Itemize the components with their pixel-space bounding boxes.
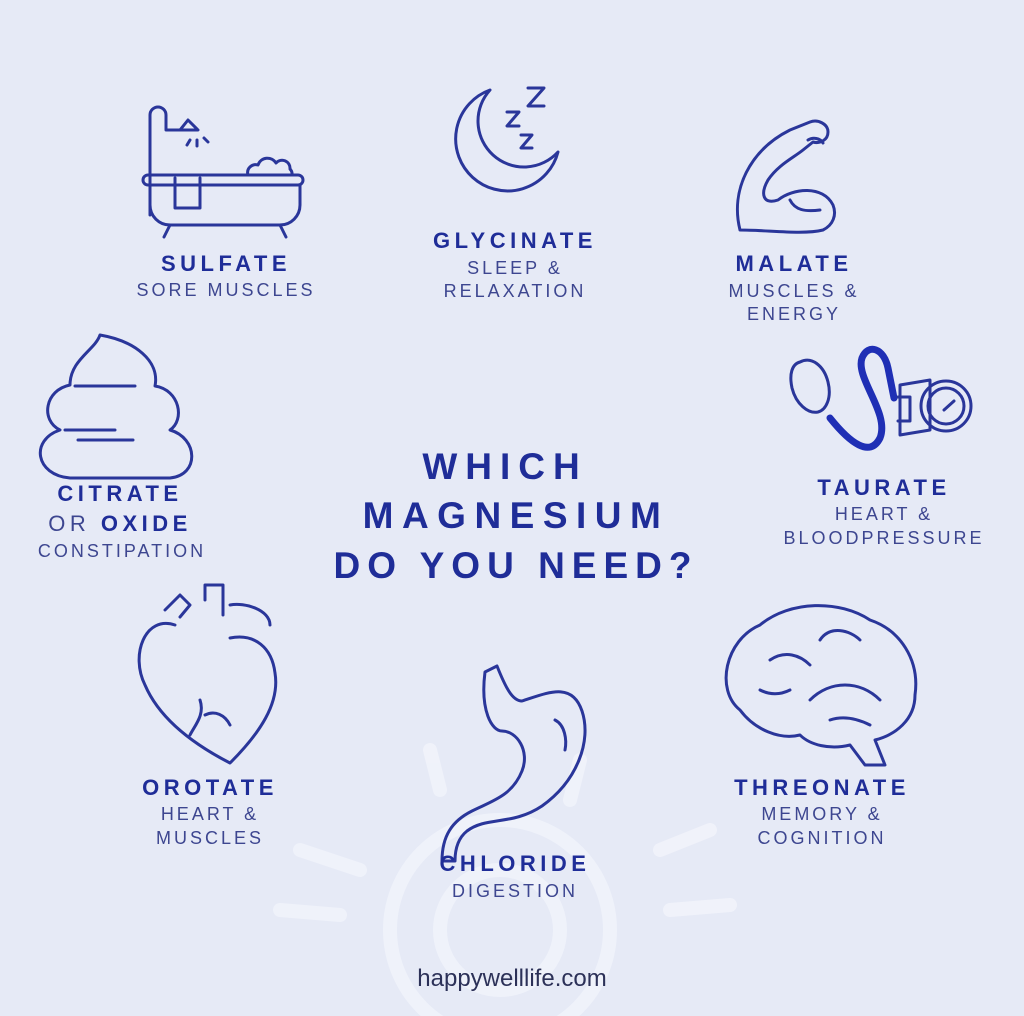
label: orotate bbox=[142, 775, 278, 848]
title: DO YOU NEED? bbox=[334, 545, 698, 586]
label: threonate: THREONATE bbox=[734, 775, 910, 800]
label: glycinate: SLEEP & bbox=[467, 258, 563, 278]
icon: muscle arm bbox=[737, 121, 835, 232]
label: chloride: CHLORIDE bbox=[440, 851, 590, 876]
label: chloride bbox=[440, 851, 590, 901]
icon: poop bbox=[40, 335, 192, 478]
decorative sun watermark bbox=[280, 750, 730, 1016]
icon: blood pressure bbox=[791, 349, 971, 447]
label: threonate: COGNITION bbox=[758, 828, 886, 848]
icon: stomach bbox=[442, 666, 585, 861]
label: sulfate: SORE MUSCLES bbox=[136, 280, 316, 300]
icon: moon zzz bbox=[456, 88, 558, 191]
label: sulfate: SULFATE bbox=[161, 251, 291, 276]
title: MAGNESIUM bbox=[363, 495, 669, 536]
label: threonate bbox=[734, 775, 910, 848]
title: WHICH bbox=[422, 446, 588, 487]
title bbox=[334, 446, 698, 586]
label: taurate: BLOODPRESSURE bbox=[783, 528, 985, 548]
label: citrate: OR OXIDE bbox=[48, 511, 192, 536]
label: taurate: TAURATE bbox=[817, 475, 951, 500]
label: malate: ENERGY bbox=[747, 304, 841, 324]
label: citrate: CONSTIPATION bbox=[38, 541, 206, 561]
label: glycinate: GLYCINATE bbox=[433, 228, 597, 253]
label: malate: MUSCLES & bbox=[728, 281, 860, 301]
label: sulfate bbox=[136, 251, 316, 300]
label: malate: MALATE bbox=[735, 251, 853, 276]
label: orotate: OROTATE bbox=[142, 775, 278, 800]
label: orotate: MUSCLES bbox=[156, 828, 264, 848]
label: malate bbox=[728, 251, 860, 324]
label: taurate bbox=[783, 475, 985, 548]
icon: bathtub bbox=[143, 107, 303, 237]
label: orotate: HEART & bbox=[161, 804, 259, 824]
icon: heart bbox=[139, 585, 276, 763]
label: taurate: HEART & bbox=[835, 504, 933, 524]
footer url: happywelllife.com bbox=[417, 965, 607, 992]
icon: brain bbox=[726, 606, 916, 765]
label: glycinate: RELAXATION bbox=[444, 281, 586, 301]
label: citrate: CITRATE bbox=[57, 481, 183, 506]
label: threonate: MEMORY & bbox=[761, 804, 883, 824]
label: chloride: DIGESTION bbox=[452, 881, 578, 901]
label: citrate bbox=[38, 481, 206, 561]
label: glycinate bbox=[433, 228, 597, 301]
